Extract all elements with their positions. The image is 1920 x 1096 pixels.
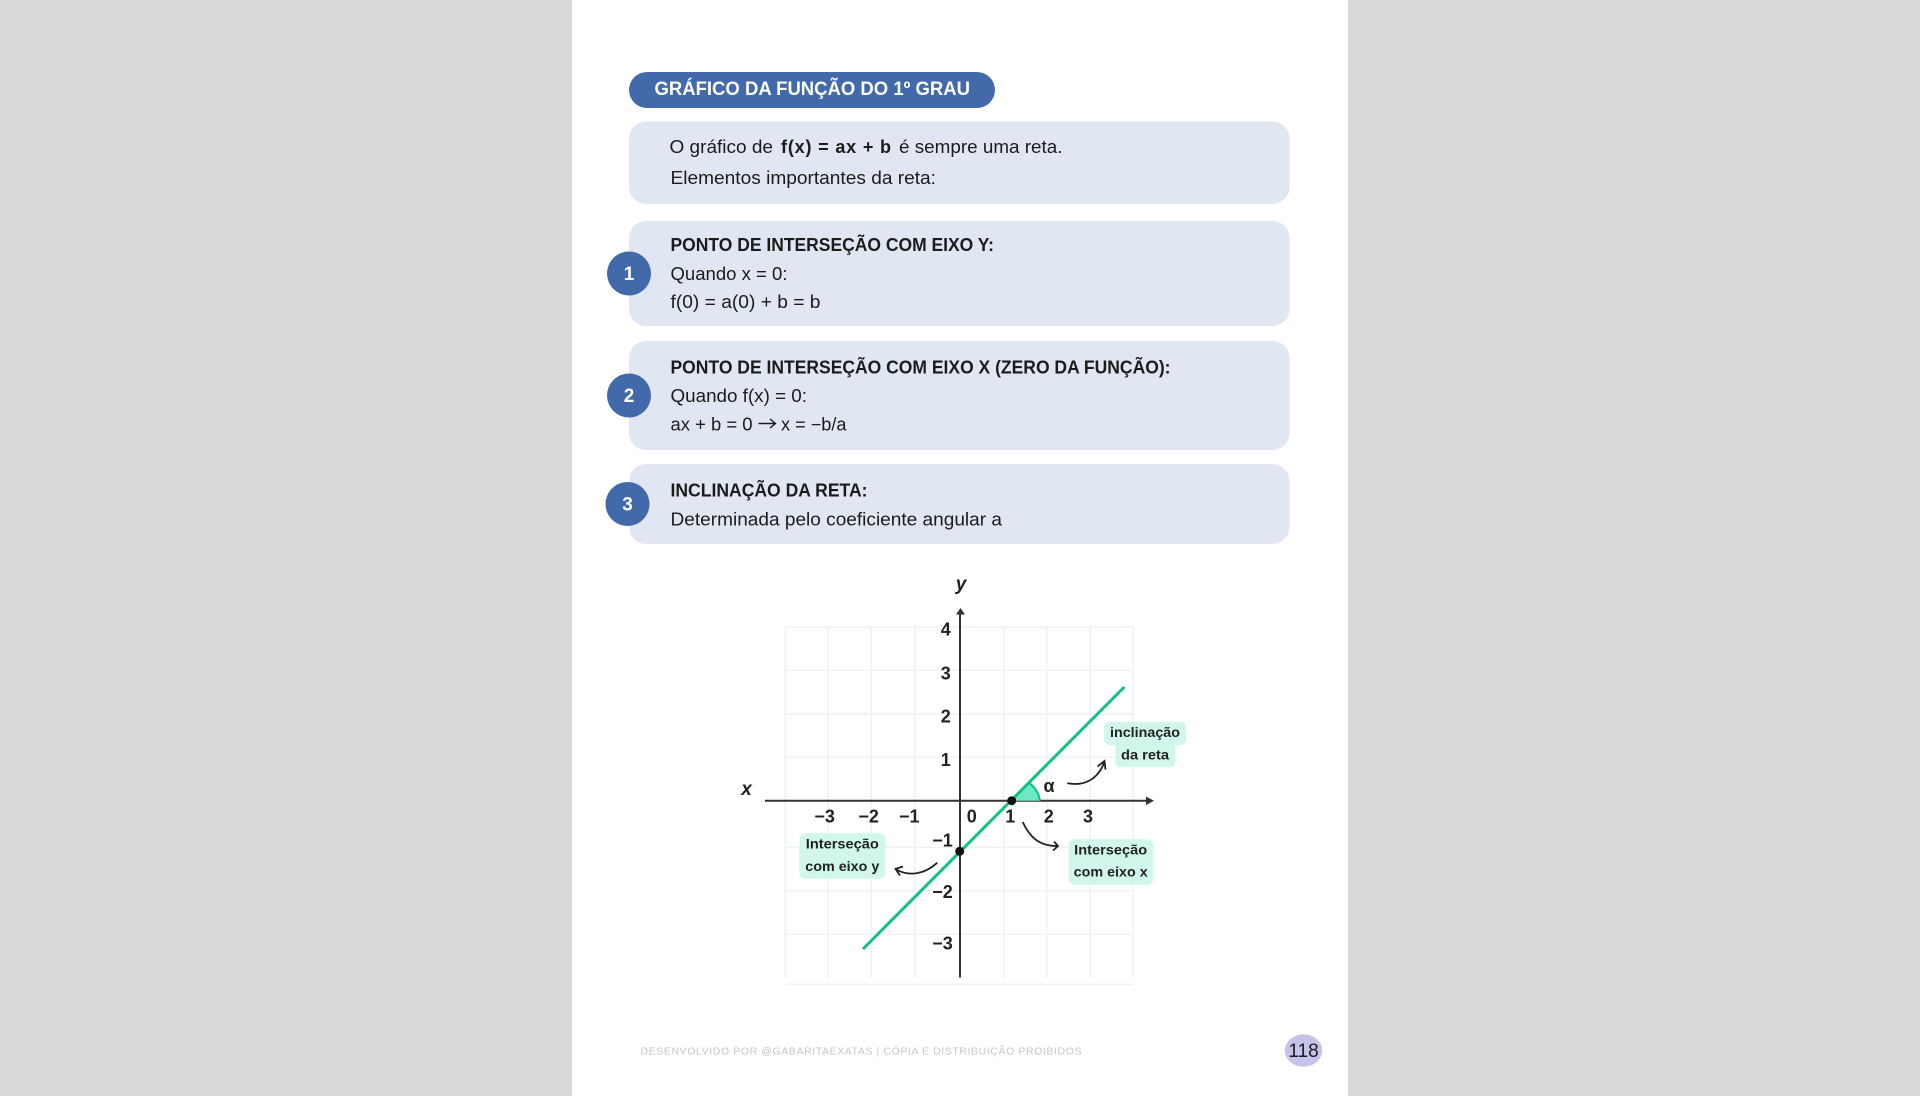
text 1: Quando x = 0: xyxy=(670,264,788,284)
chart: line graph xyxy=(740,574,1186,984)
x tick labels: −3 xyxy=(814,807,835,827)
axis label x: x xyxy=(740,779,753,800)
x tick labels: 0 xyxy=(967,807,977,827)
badge 2: 2 xyxy=(624,386,634,407)
x tick labels xyxy=(814,807,1093,827)
callout: x intersection: com eixo x xyxy=(1074,864,1148,880)
text 3: Determinada pelo coeficiente angular a xyxy=(670,510,1003,530)
text: definition: f(x) = ax + b xyxy=(781,137,891,157)
title xyxy=(629,72,995,108)
y tick labels: 2 xyxy=(941,707,951,727)
y tick labels: −3 xyxy=(932,933,953,953)
panel: intro xyxy=(629,122,1290,204)
heading 3: INCLINAÇÃO DA RETA: xyxy=(670,480,868,500)
badge 2 xyxy=(607,374,651,418)
callout: slope: da reta xyxy=(1121,746,1169,762)
text: definition: O gráfico de xyxy=(670,137,773,157)
page number xyxy=(1285,1034,1322,1067)
x tick labels: 3 xyxy=(1083,807,1093,827)
text 1 xyxy=(670,264,820,312)
title: GRÁFICO DA FUNÇÃO DO 1º GRAU xyxy=(654,78,970,100)
text: definition: é sempre uma reta. xyxy=(899,137,1062,157)
y tick labels: 4 xyxy=(941,620,951,640)
heading 1: PONTO DE INTERSEÇÃO COM EIXO Y: xyxy=(670,234,994,255)
callout: y intersection: Interseção xyxy=(806,835,879,851)
panel: item 1 xyxy=(607,221,1290,326)
badge 3: 3 xyxy=(622,494,633,516)
callout: x intersection xyxy=(1069,839,1153,885)
text 2: x = −b/a xyxy=(781,414,847,434)
y tick labels: 1 xyxy=(941,750,951,770)
axes xyxy=(765,608,1154,978)
panel: item 3 xyxy=(606,464,1290,544)
x tick labels: 2 xyxy=(1044,807,1054,827)
callout: y intersection: com eixo y xyxy=(805,858,880,874)
arrow: x intersection xyxy=(1023,822,1058,850)
angle wedge xyxy=(1012,782,1040,801)
green line xyxy=(863,687,1124,949)
arrow: slope xyxy=(1067,761,1106,784)
x tick labels: −1 xyxy=(899,807,920,827)
axis label y: y xyxy=(955,574,968,595)
callout: slope xyxy=(1104,722,1186,767)
callout: y intersection xyxy=(799,833,885,879)
badge 1: 1 xyxy=(624,264,635,285)
badge 1 xyxy=(607,252,651,296)
page number: 118 xyxy=(1288,1041,1319,1062)
text: elements: Elementos importantes da reta: xyxy=(670,168,936,188)
x tick labels: 1 xyxy=(1005,807,1015,827)
x tick labels: −2 xyxy=(858,807,879,827)
callout: x intersection: Interseção xyxy=(1074,841,1147,857)
footer text: DESENVOLVIDO POR @GABARITAEXATAS | CÓPIA E DISTRIBUIÇÃO PROIBIDOS xyxy=(640,1044,1082,1058)
y tick labels xyxy=(932,620,953,953)
heading 2: PONTO DE INTERSEÇÃO COM EIXO X (ZERO DA FUNÇÃO): xyxy=(670,356,1170,378)
y tick labels: −1 xyxy=(932,831,953,851)
badge 3 xyxy=(606,482,650,526)
y tick labels: 3 xyxy=(941,663,951,683)
text 2 xyxy=(670,386,847,434)
text: definition xyxy=(670,137,1062,157)
axis intersection point y xyxy=(955,847,964,856)
axis intersection point x xyxy=(1007,796,1016,805)
y tick labels: −2 xyxy=(932,882,953,902)
callout: slope: inclinação xyxy=(1110,724,1180,740)
text 1: f(0) = a(0) + b = b xyxy=(670,292,820,312)
text 2: Quando f(x) = 0: xyxy=(670,386,807,406)
alpha label: α xyxy=(1043,776,1055,796)
arrow: y intersection xyxy=(896,863,937,876)
panel: item 2 xyxy=(607,341,1290,450)
text 2: ax + b = 0 xyxy=(670,414,752,434)
